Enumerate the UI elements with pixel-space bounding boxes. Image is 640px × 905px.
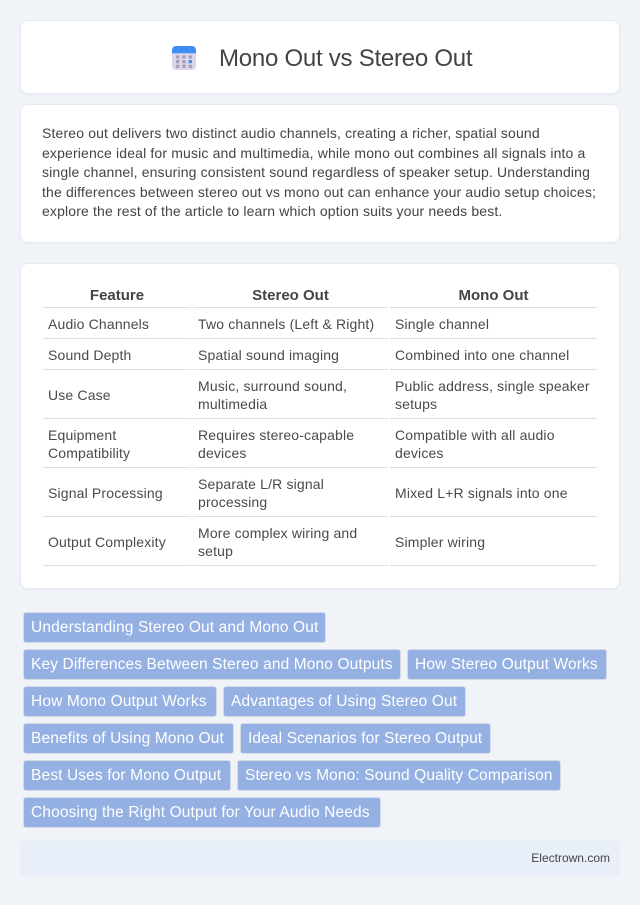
title: Mono Out vs Stereo Out (219, 45, 472, 72)
header card (20, 20, 620, 94)
tag: Ideal Scenarios for Stereo Output (248, 730, 482, 747)
icon: calendar (172, 46, 196, 70)
row: equipment compatibility: Equipment (48, 427, 116, 443)
tag (223, 686, 466, 717)
row: sound depth: Combined into one channel (395, 347, 569, 363)
intro paragraph: the differences between stereo out vs mono out can enhance your audio setup choices; (42, 184, 596, 200)
row: equipment compatibility: devices (198, 445, 247, 461)
row: equipment compatibility (48, 427, 555, 461)
table header row: Feature (90, 287, 144, 304)
row: audio channels: Audio Channels (48, 316, 149, 332)
tag: How Stereo Output Works (415, 656, 598, 673)
comparison table card (20, 263, 620, 589)
footer credit: Electrown.com (531, 851, 610, 865)
intro paragraph: single channel, ensuring consistent sound regardless of speaker setup. Understanding (42, 164, 590, 180)
row: signal processing: processing (198, 494, 267, 510)
row: signal processing: Separate L/R signal (198, 476, 324, 492)
row: sound depth: Sound Depth (48, 347, 132, 363)
row: audio channels (48, 316, 489, 332)
row: equipment compatibility: Compatibility (48, 445, 130, 461)
row: equipment compatibility: devices (395, 445, 444, 461)
table header row: Mono Out (458, 287, 528, 304)
intro paragraph: experience ideal for music and multimedia, while mono out combines all signals into a (42, 145, 585, 161)
tag: Choosing the Right Output for Your Audio Needs (31, 804, 370, 821)
tag: Stereo vs Mono: Sound Quality Comparison (245, 767, 553, 784)
row: signal processing: Signal Processing (48, 485, 163, 501)
row: signal processing: Mixed L+R signals into one (395, 485, 568, 501)
row: output complexity: Output Complexity (48, 534, 166, 550)
row: equipment compatibility: Compatible with all audio (395, 427, 555, 443)
intro paragraph: explore the rest of the article to learn which option suits your needs best. (42, 203, 502, 219)
row: use case: Public address, single speaker (395, 378, 590, 394)
table header row (90, 287, 528, 304)
tag: Understanding Stereo Out and Mono Out (31, 619, 318, 636)
footer (20, 841, 620, 875)
row: sound depth (48, 347, 569, 363)
row: use case: setups (395, 396, 437, 412)
topic tags (23, 612, 607, 828)
row: output complexity (48, 525, 485, 559)
tag (23, 723, 234, 754)
intro text card (20, 104, 620, 243)
row: equipment compatibility: Requires stereo-capable (198, 427, 354, 443)
tag (23, 686, 217, 717)
tag: Benefits of Using Mono Out (31, 730, 224, 747)
row: signal processing (48, 476, 568, 510)
row: use case: multimedia (198, 396, 267, 412)
tag: Advantages of Using Stereo Out (231, 693, 457, 710)
row: audio channels: Two channels (Left & Right) (198, 316, 374, 332)
row: sound depth: Spatial sound imaging (198, 347, 339, 363)
row: output complexity: More complex wiring and (198, 525, 357, 541)
tag (407, 649, 607, 680)
row: use case: Use Case (48, 387, 111, 403)
row: use case (48, 378, 590, 412)
tag (240, 723, 491, 754)
tag (23, 797, 381, 828)
intro paragraph: Stereo out delivers two distinct audio channels, creating a richer, spatial sound (42, 125, 540, 141)
tag: Key Differences Between Stereo and Mono Outputs (31, 656, 393, 673)
row: output complexity: setup (198, 543, 233, 559)
row: output complexity: Simpler wiring (395, 534, 485, 550)
tag (23, 649, 401, 680)
row: use case: Music, surround sound, (198, 378, 347, 394)
tag (23, 612, 326, 643)
tag (237, 760, 561, 791)
tag: Best Uses for Mono Output (31, 767, 221, 784)
intro paragraph (42, 125, 596, 219)
table header row: Stereo Out (252, 287, 329, 304)
tag (23, 760, 231, 791)
row: audio channels: Single channel (395, 316, 489, 332)
tag: How Mono Output Works (31, 693, 207, 710)
